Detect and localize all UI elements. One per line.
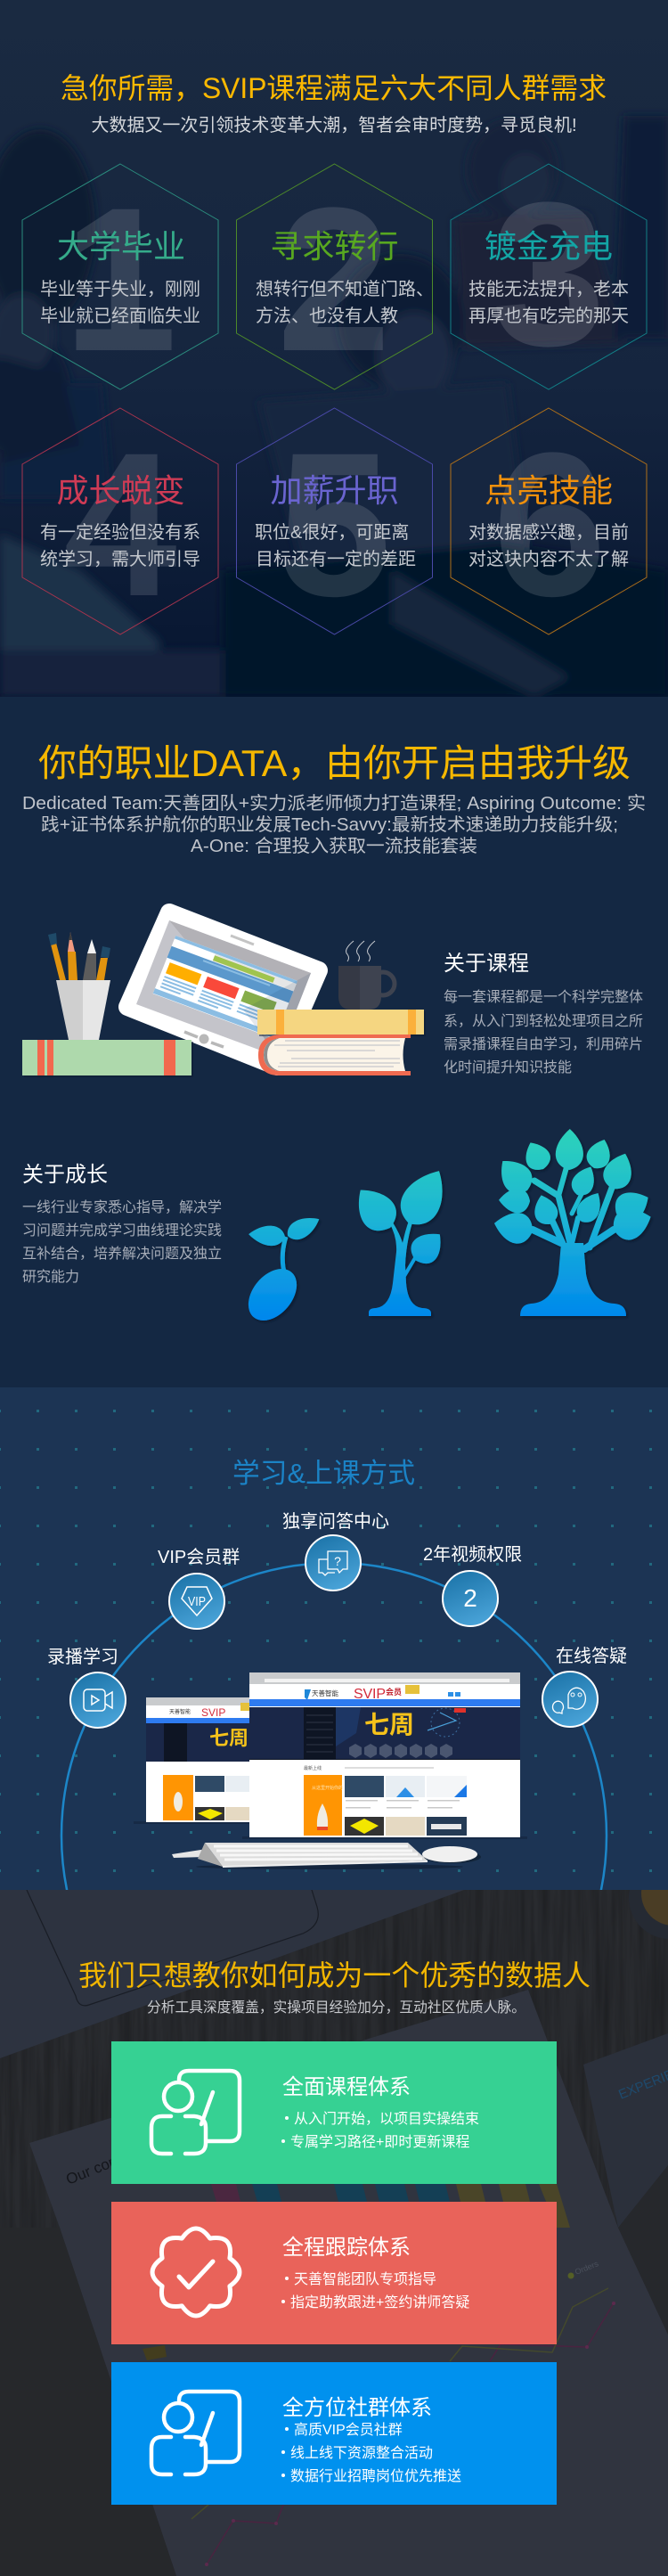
- icon: teacher at board: [151, 2392, 240, 2474]
- text block: about the course: 关于课程: [444, 952, 529, 976]
- panel: 寻求转行: 寻求转行: [270, 228, 399, 265]
- background: dark desk with laptop and reports: Our company: [63, 2138, 155, 2188]
- arc connecting the methods: [61, 1563, 607, 1890]
- method: VIP会员群: [158, 1547, 240, 1629]
- panel: 成长蜕变: 统学习，需大师引导: [40, 549, 200, 569]
- panel: 点亮技能: 对数据感兴趣，目前: [468, 522, 629, 543]
- browser mockup: back window: [134, 1697, 258, 1824]
- method: 2年视频权限: 2: [463, 1584, 477, 1612]
- panel: 成长蜕变: 成长蜕变: [56, 472, 185, 509]
- card: 全方位社群体系: 全方位社群体系: [282, 2396, 432, 2420]
- text block: about growth: [22, 1163, 222, 1285]
- icon: tablet: [127, 912, 319, 1067]
- panel: 点亮技能: 点亮技能: [485, 472, 613, 509]
- card: 全方位社群体系: 高质VIP会员社群: [294, 2422, 403, 2438]
- card: 全方位社群体系: 线上线下资源整合活动: [290, 2445, 433, 2461]
- section: learning methods: [0, 1387, 668, 1890]
- section: what we teach: [0, 1857, 668, 2576]
- method: 独享问答中心: 独享问答中心: [282, 1511, 389, 1532]
- heading: 学习&上课方式: [232, 1458, 415, 1489]
- background: dark desk with laptop and reports: Orders: [574, 2259, 600, 2277]
- card: 全程跟踪体系: 指定助教跟进+签约讲师答疑: [290, 2294, 469, 2310]
- panel: 加薪升职: 加薪升职: [270, 472, 399, 509]
- subheading: 大数据又一次引领技术变革大潮，智者会审时度势，寻觅良机!: [91, 115, 577, 135]
- panel: 镀金充电: 技能无法提升，老本: [468, 279, 629, 299]
- icon: teacher at board: [151, 2071, 240, 2154]
- browser mockup: front window: 从这里开始你的: [312, 1785, 343, 1791]
- section: career data: [22, 744, 652, 1322]
- panel: 加薪升职: 职位&很好，可距离: [255, 522, 409, 543]
- browser mockup: front window: [242, 1672, 527, 1839]
- icon: keyboard and mouse: [172, 1843, 481, 1869]
- icon: pen cup: [56, 980, 110, 1040]
- text block: about the course: 化时间提升知识技能: [444, 1059, 572, 1075]
- text block: about growth: 习问题并完成学习曲线理论实践: [22, 1223, 222, 1239]
- method: 在线答疑: 在线答疑: [556, 1646, 627, 1666]
- panel: 成长蜕变: 有一定经验但没有系: [40, 522, 200, 543]
- panel: 镀金充电: 再厚也有吃完的那天: [468, 306, 629, 326]
- icon: green book: [22, 1040, 193, 1077]
- browser mockup: back window: SVIP: [201, 1706, 225, 1719]
- intro paragraph: 践+证书体系护航你的职业发展Tech-Savvy:最新技术速递助力技能升级;: [41, 814, 618, 835]
- text block: about the course: 每一套课程都是一个科学完整体: [444, 989, 643, 1005]
- subheading: 分析工具深度覆盖，实操项目经验加分，互动社区优质人脉。: [147, 1999, 525, 2016]
- panel: 加薪升职: [237, 408, 433, 639]
- text block: about the course: 系，从入门到轻松处理项目之所: [444, 1013, 643, 1029]
- method: 独享问答中心: ?: [334, 1554, 341, 1568]
- panel: 大学毕业: 毕业等于失业，刚刚: [40, 279, 200, 299]
- method: VIP会员群: VIP: [188, 1594, 206, 1609]
- intro paragraph: [22, 793, 646, 856]
- browser mockup: front window: SVIP: [354, 1687, 386, 1702]
- panel: 大学毕业: 1: [63, 165, 177, 394]
- text block: about growth: 互补结合，培养解决问题及独立: [22, 1246, 222, 1262]
- browser mockup: front window: 天善智能: [312, 1689, 338, 1697]
- card: 全面课程体系: 从入门开始，以项目实操结束: [294, 2111, 479, 2127]
- panel: 镀金充电: 镀金充电: [485, 228, 613, 265]
- text block: about the course: 需录播课程自由学习，利用碎片: [444, 1036, 643, 1052]
- method: 录播学习: 录播学习: [47, 1647, 118, 1667]
- card: 全程跟踪体系: [111, 2202, 557, 2344]
- icon: verified badge: [152, 2228, 240, 2316]
- icon: pencils: [48, 932, 110, 980]
- card: 全方位社群体系: 数据行业招聘岗位优先推送: [290, 2468, 461, 2484]
- text block: about growth: 一线行业专家悉心指导，解决学: [22, 1199, 222, 1215]
- text block: about growth: 关于成长: [22, 1163, 108, 1187]
- panel: 点亮技能: [451, 408, 647, 639]
- panel: 大学毕业: 大学毕业: [57, 228, 185, 265]
- browser mockup: front window: 会员: [386, 1687, 402, 1697]
- panel: 寻求转行: 方法、也没有人教: [256, 306, 398, 326]
- browser mockup: back window: 七周: [209, 1727, 248, 1749]
- card: 全程跟踪体系: 全程跟踪体系: [282, 2236, 411, 2260]
- panel: 加薪升职: 5: [278, 410, 391, 639]
- method: VIP会员群: VIP会员群: [158, 1547, 240, 1567]
- panel: 大学毕业: [22, 164, 218, 394]
- panel: 大学毕业: 毕业就已经面临失业: [40, 306, 200, 326]
- text block: about the course: [444, 952, 643, 1075]
- browser mockup: front window: 最新上线: [304, 1765, 322, 1771]
- panel: 镀金充电: 3: [492, 159, 606, 388]
- panel: 镀金充电: [451, 159, 647, 389]
- panel: 寻求转行: 想转行但不知道门路、: [256, 279, 434, 299]
- card: 全程跟踪体系: 天善智能团队专项指导: [294, 2271, 436, 2287]
- heading: 急你所需，SVIP课程满足六大不同人群需求: [61, 72, 607, 104]
- section: six audience groups: [0, 74, 668, 697]
- method: 2年视频权限: 2年视频权限: [423, 1544, 522, 1565]
- intro paragraph: Dedicated Team:天善团队+实力派老师倾力打造课程; Aspiring Outcome: 实: [22, 793, 646, 814]
- panel: 点亮技能: 对这块内容不太了解: [468, 549, 629, 569]
- background: dark desk with laptop and reports: [0, 1857, 668, 2576]
- panel: 寻求转行: 2: [277, 165, 391, 394]
- method: 2年视频权限: [423, 1544, 522, 1626]
- method: 在线答疑: [542, 1646, 627, 1727]
- icon: coffee mug: [338, 941, 395, 1010]
- heading: 我们只想教你如何成为一个优秀的数据人: [78, 1959, 591, 1991]
- method: 独享问答中心: [282, 1511, 389, 1591]
- text block: about growth: 研究能力: [22, 1269, 79, 1285]
- panel: 寻求转行: [237, 164, 434, 394]
- icon: sprout, sapling and tree growth: [248, 1129, 652, 1322]
- panel: 成长蜕变: 4: [63, 410, 177, 639]
- browser mockup: back window: 天善智能: [169, 1708, 191, 1715]
- intro paragraph: A-One: 合理投入获取一流技能套装: [191, 836, 477, 856]
- panel: 点亮技能: 6: [493, 410, 607, 639]
- card: 全面课程体系: 专属学习路径+即时更新课程: [290, 2134, 469, 2150]
- card: 全方位社群体系: [111, 2362, 557, 2505]
- card: 全面课程体系: [111, 2041, 557, 2184]
- card: 全面课程体系: 全面课程体系: [282, 2075, 411, 2099]
- method: 录播学习: [47, 1647, 126, 1728]
- background: blurred team photo: [0, 117, 668, 697]
- browser mockup: front window: 七周: [364, 1711, 414, 1738]
- heading: 你的职业DATA，由你开启由我升级: [38, 742, 631, 784]
- panel: 加薪升职: 目标还有一定的差距: [256, 549, 416, 569]
- panel: 成长蜕变: [22, 408, 218, 639]
- illustration: desk with tablet, books, pencils and mug: [22, 912, 426, 1077]
- icon: stacked books: [257, 1010, 426, 1075]
